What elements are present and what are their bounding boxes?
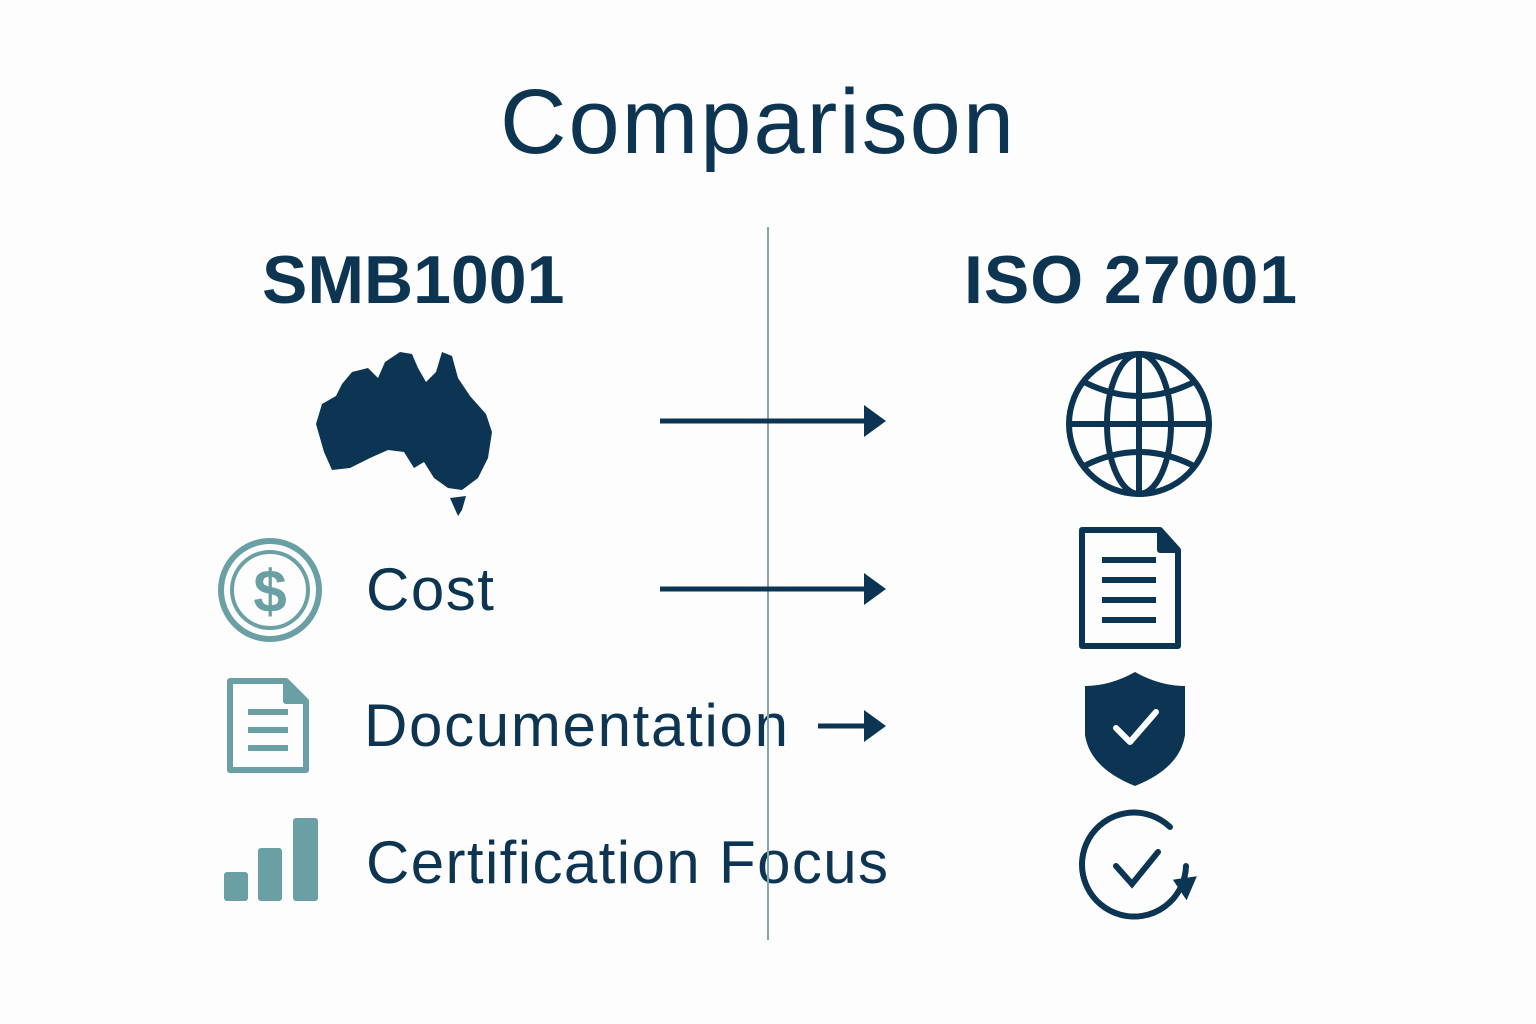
arrow 2 [660, 573, 886, 605]
icon: dollar: $ [253, 558, 287, 625]
icon: navy document [1082, 530, 1178, 646]
icon: bar chart [224, 818, 318, 901]
arrow 3 [818, 710, 886, 742]
label: Documentation: Documentation [364, 692, 790, 759]
icon: globe [1069, 354, 1209, 494]
label: Certification Focus: Certification Focus [366, 829, 889, 896]
title: Comparison [500, 71, 1016, 173]
icon: circular check [1082, 813, 1192, 917]
arrow 1 [660, 405, 886, 437]
heading: ISO 27001: ISO 27001 [964, 242, 1298, 318]
heading: SMB1001: SMB1001 [262, 242, 564, 318]
icon: dollar [221, 541, 319, 639]
icon: teal document [230, 681, 306, 770]
icon: shield [1085, 672, 1185, 786]
label: Cost: Cost [366, 556, 495, 623]
icon: Australia map [316, 352, 492, 516]
